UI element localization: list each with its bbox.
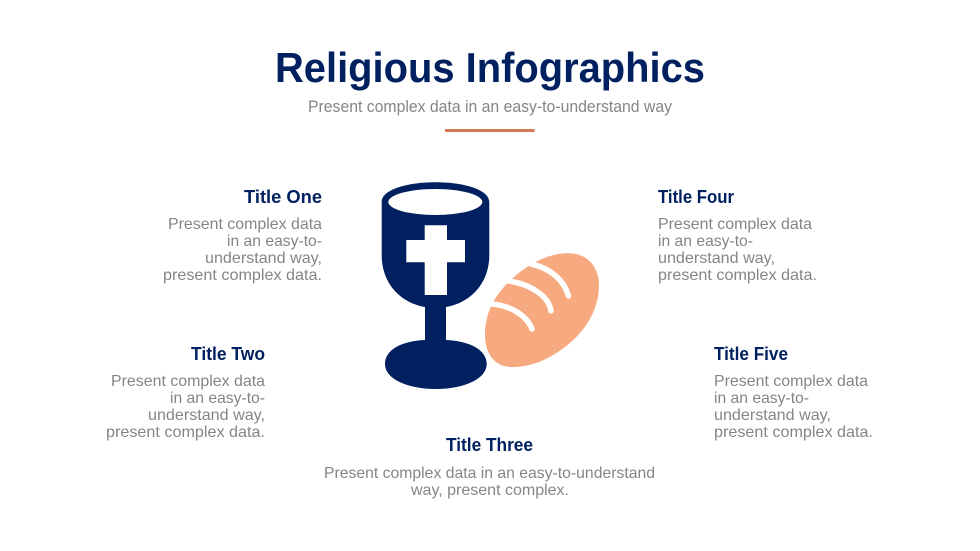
icon: goblet with cross	[382, 182, 489, 389]
title: Religious Infographics	[275, 44, 705, 91]
text block: title four: understand way,	[658, 250, 775, 267]
text block: title five: in an easy-to-	[714, 390, 809, 407]
text block: title two: understand way,	[148, 407, 265, 424]
text block: title three: Present complex data in an easy-to-understand	[324, 465, 655, 482]
text block: title four: Present complex data	[658, 216, 812, 233]
text block: title four: present complex data.	[658, 267, 817, 284]
text block: title five: Title Five	[714, 344, 788, 364]
text block: title three: Title Three	[446, 435, 533, 455]
text block: title two: present complex data.	[106, 424, 265, 441]
text block: title one: understand way,	[205, 250, 322, 267]
text block: title one	[163, 187, 322, 284]
text block: title five	[714, 344, 873, 441]
text block: title one: Present complex data	[168, 216, 322, 233]
text block: title five: Present complex data	[714, 373, 868, 390]
text block: title two: Present complex data	[111, 373, 265, 390]
text block: title one: Title One	[244, 187, 322, 207]
accent rule	[445, 129, 534, 132]
text block: title two: Title Two	[191, 344, 265, 364]
text block: title three	[324, 435, 655, 499]
subtitle: Present complex data in an easy-to-understand way	[308, 98, 673, 116]
text block: title one: in an easy-to-	[227, 233, 322, 250]
text block: title two	[106, 344, 265, 441]
text block: title four: in an easy-to-	[658, 233, 753, 250]
text block: title one: present complex data.	[163, 267, 322, 284]
text block: title four	[658, 187, 817, 284]
text block: title five: understand way,	[714, 407, 831, 424]
text block: title two: in an easy-to-	[170, 390, 265, 407]
text block: title four: Title Four	[658, 187, 734, 207]
text block: title three: way, present complex.	[410, 482, 569, 499]
icon: bread loaf	[485, 253, 599, 367]
text block: title five: present complex data.	[714, 424, 873, 441]
